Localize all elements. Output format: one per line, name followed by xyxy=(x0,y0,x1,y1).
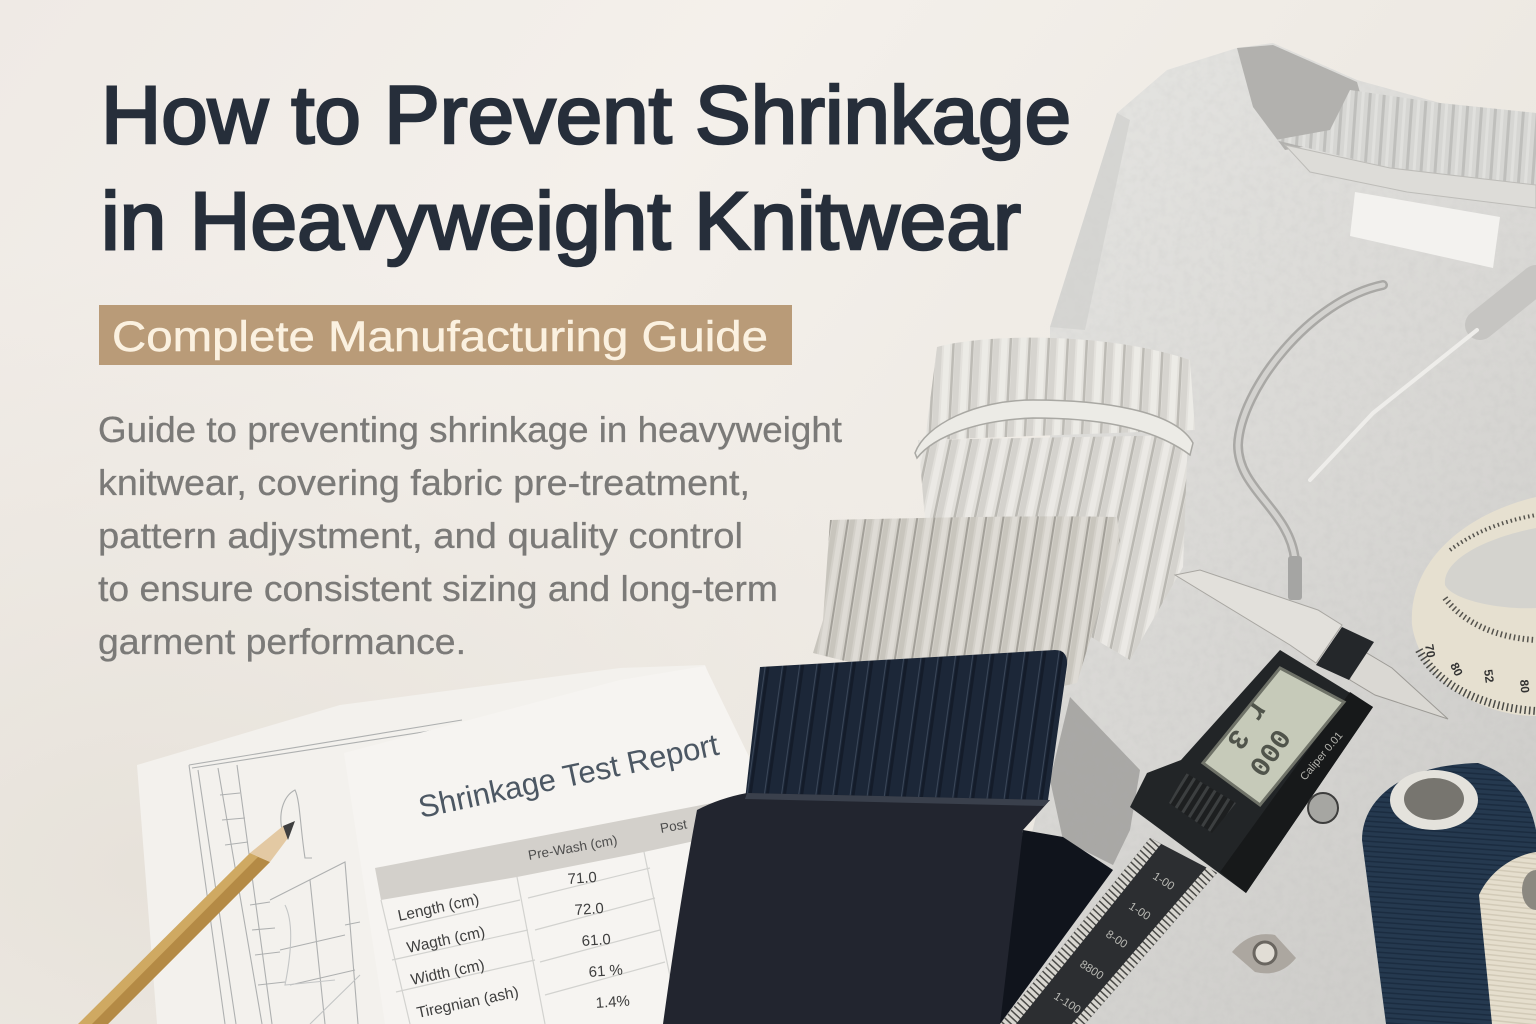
description text: garment performance. xyxy=(98,621,466,662)
metal snap button xyxy=(1232,934,1296,973)
results table xyxy=(381,816,688,1024)
description text xyxy=(98,409,842,662)
brand label: Caliper 0.01 xyxy=(1298,730,1345,783)
LCD screen xyxy=(1203,668,1344,805)
lower sleeve ribs xyxy=(918,435,1188,660)
ruler: 1-00 xyxy=(1150,870,1176,893)
results table: 1.4% xyxy=(595,993,630,1012)
ruler xyxy=(1000,838,1217,1024)
cream thread spool xyxy=(1479,852,1536,1024)
tape measure: 52 xyxy=(1481,668,1497,684)
rolled edge xyxy=(915,400,1193,458)
grey hem under caliper xyxy=(1050,697,1140,865)
ruler: 8800 xyxy=(1077,958,1105,982)
results table: Tiregnian (ash) xyxy=(415,984,520,1022)
subtitle badge xyxy=(99,305,792,365)
inner neck shadow xyxy=(1237,45,1372,150)
sweatshirt body xyxy=(985,43,1536,1024)
caliper body xyxy=(1130,650,1373,893)
results table: Width (cm) xyxy=(409,957,486,989)
description text: to ensure consistent sizing and long-term xyxy=(98,568,778,609)
results table: Post xyxy=(659,816,688,836)
navy ribbed fabric xyxy=(745,650,1067,800)
navy thread spool xyxy=(1362,763,1536,1024)
tape measure xyxy=(1412,497,1536,716)
results table: 72.0 xyxy=(574,900,604,919)
results table: 61 % xyxy=(588,962,623,981)
title: in Heavyweight Knitwear xyxy=(101,176,1021,267)
cord metal tip xyxy=(1288,556,1302,600)
ruler: 1-100 xyxy=(1051,990,1083,1017)
results table: Wagth (cm) xyxy=(405,924,487,957)
knurled thumb pad xyxy=(1169,773,1236,833)
front sheet: Shrinkage Test Report xyxy=(344,666,770,1024)
photo: test report papers xyxy=(137,665,770,1024)
rolled ribbed cuff xyxy=(915,338,1195,660)
ruler: 8-00 xyxy=(1103,928,1129,951)
LCD screen: 000 xyxy=(1241,722,1295,781)
lock knob xyxy=(1308,793,1338,823)
upper cuff ribs xyxy=(925,338,1195,440)
LCD screen: r 3 xyxy=(1219,695,1273,754)
title: How to Prevent Shrinkage xyxy=(101,70,1071,161)
light ribbed folded fabric xyxy=(813,516,1120,700)
tape measure: 80 xyxy=(1447,660,1466,679)
subtitle badge: Complete Manufacturing Guide xyxy=(112,313,768,361)
report heading: Shrinkage Test Report xyxy=(415,727,722,825)
results table: Length (cm) xyxy=(396,891,481,925)
dark fabric behind xyxy=(990,830,1113,1024)
neck label xyxy=(1350,192,1500,268)
lower jaw xyxy=(1345,640,1448,719)
ruler: 1-00 xyxy=(1126,900,1152,923)
upper jaw xyxy=(1175,570,1342,663)
digital caliper xyxy=(1000,570,1448,1024)
description text: Guide to preventing shrinkage in heavyweight xyxy=(98,409,842,450)
collar rib band xyxy=(1275,90,1536,185)
back sheet with pattern drawing xyxy=(137,665,760,1024)
table header band xyxy=(375,797,745,900)
description text: knitwear, covering fabric pre-treatment, xyxy=(98,462,750,503)
results table: 71.0 xyxy=(567,869,597,888)
results table: 61.0 xyxy=(581,931,611,950)
drawstring cords xyxy=(1238,280,1536,600)
navy folded fabric xyxy=(663,793,1113,1024)
beam xyxy=(1316,627,1374,680)
collar lower edge xyxy=(1285,145,1536,208)
tape measure: 80 xyxy=(1517,679,1532,694)
icon: pencil xyxy=(78,821,295,1024)
description text: pattern adjystment, and quality control xyxy=(98,515,743,556)
results table: Pre-Wash (cm) xyxy=(527,833,618,863)
tape measure: 70 xyxy=(1422,643,1438,659)
shoulder shade xyxy=(1050,113,1130,330)
title xyxy=(101,70,1071,267)
